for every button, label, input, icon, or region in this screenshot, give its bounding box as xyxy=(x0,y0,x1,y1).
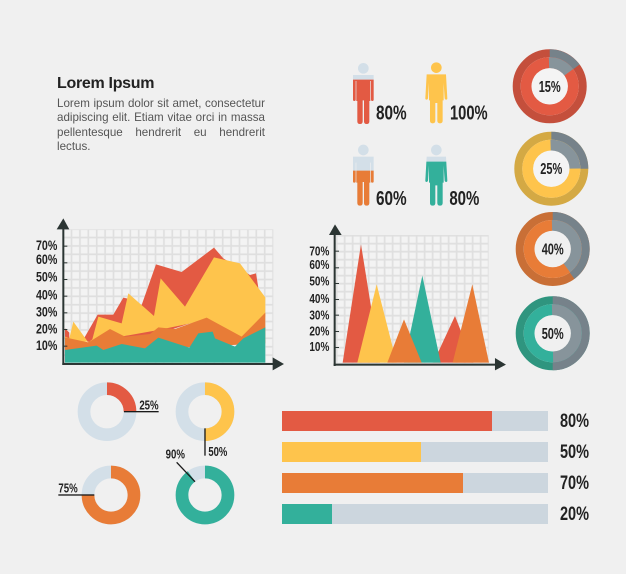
area: yellow series xyxy=(65,257,265,342)
bar: 50% xyxy=(282,441,589,463)
y axis labels xyxy=(309,244,330,354)
y axis labels: 10% xyxy=(309,339,330,354)
y axis labels: 70% xyxy=(36,238,57,253)
people labels: 60% xyxy=(376,188,407,210)
ring: 15% xyxy=(517,53,583,119)
ring: 25% xyxy=(518,136,584,202)
body text xyxy=(57,97,265,153)
axes xyxy=(329,224,506,370)
peak: red small xyxy=(433,316,473,363)
bar: 20%: 20% xyxy=(560,503,589,525)
ring: 50%: 50% xyxy=(542,326,564,343)
bar: 80% xyxy=(282,410,589,432)
ring: 40%: 40% xyxy=(542,242,564,258)
peak: orange tall xyxy=(453,284,489,363)
people labels xyxy=(376,102,488,210)
people labels: 80% xyxy=(376,102,407,124)
donut: 50%: 50% xyxy=(208,445,227,459)
y axis labels: 60% xyxy=(309,257,330,272)
axes xyxy=(57,218,284,370)
progress bars xyxy=(282,410,589,525)
body text: adipiscing elit. Etiam vitae orci in massa xyxy=(57,111,265,124)
body text: pellentesque hendrerit eu hendrerit xyxy=(57,126,265,139)
bar: 20% xyxy=(282,503,589,525)
donut: 75%: 75% xyxy=(58,481,78,495)
peak: yellow xyxy=(357,284,397,363)
bar: 70% xyxy=(282,472,589,494)
person: 60% orange xyxy=(353,145,374,206)
triangle chart xyxy=(309,224,506,370)
donut: 25% xyxy=(84,389,159,435)
people labels: 100% xyxy=(450,102,488,124)
donut: 50% xyxy=(182,389,228,459)
donut: 75% xyxy=(58,472,134,518)
ring: 25%: 25% xyxy=(540,161,562,178)
person: 80% teal xyxy=(425,145,447,206)
body text: lectus. xyxy=(57,140,91,153)
y axis labels: 40% xyxy=(36,287,57,302)
y axis labels: 20% xyxy=(36,322,57,337)
ring: 40% xyxy=(520,216,586,282)
peak: teal xyxy=(404,276,441,363)
ring: 50% xyxy=(520,300,586,366)
bar: 80%: 80% xyxy=(560,410,589,432)
heading: Lorem Ipsum xyxy=(57,75,154,92)
people labels: 80% xyxy=(449,188,479,210)
donut: 25%: 25% xyxy=(139,399,159,413)
text block: intro xyxy=(57,75,265,153)
person: 100% yellow xyxy=(425,62,447,123)
area chart xyxy=(36,218,284,370)
bar: 70%: 70% xyxy=(560,472,589,494)
donut: 90%: 90% xyxy=(166,447,185,461)
y axis labels: 50% xyxy=(36,269,57,284)
small donuts xyxy=(58,389,228,518)
peak: red tall xyxy=(343,244,380,363)
body text: Lorem ipsum dolor sit amet, consectetur xyxy=(57,97,265,110)
area: teal series xyxy=(65,327,265,363)
ring: 15%: 15% xyxy=(539,79,561,96)
people pictograms xyxy=(353,62,488,210)
area: red series xyxy=(65,328,69,340)
y axis labels: 30% xyxy=(309,307,330,322)
y axis labels: 10% xyxy=(36,338,57,353)
bar: 50%: 50% xyxy=(560,441,589,463)
y axis labels: 20% xyxy=(309,324,330,339)
donut: 90% xyxy=(166,447,228,518)
y axis labels: 30% xyxy=(36,305,57,320)
area: orange series xyxy=(65,313,265,353)
y axis labels: 50% xyxy=(309,274,330,289)
peak: orange small xyxy=(387,319,422,363)
person: 80% red xyxy=(353,63,374,124)
y axis labels: 60% xyxy=(36,252,57,267)
y axis labels xyxy=(36,238,57,353)
y axis labels: 70% xyxy=(309,244,330,259)
y axis labels: 40% xyxy=(309,291,330,306)
